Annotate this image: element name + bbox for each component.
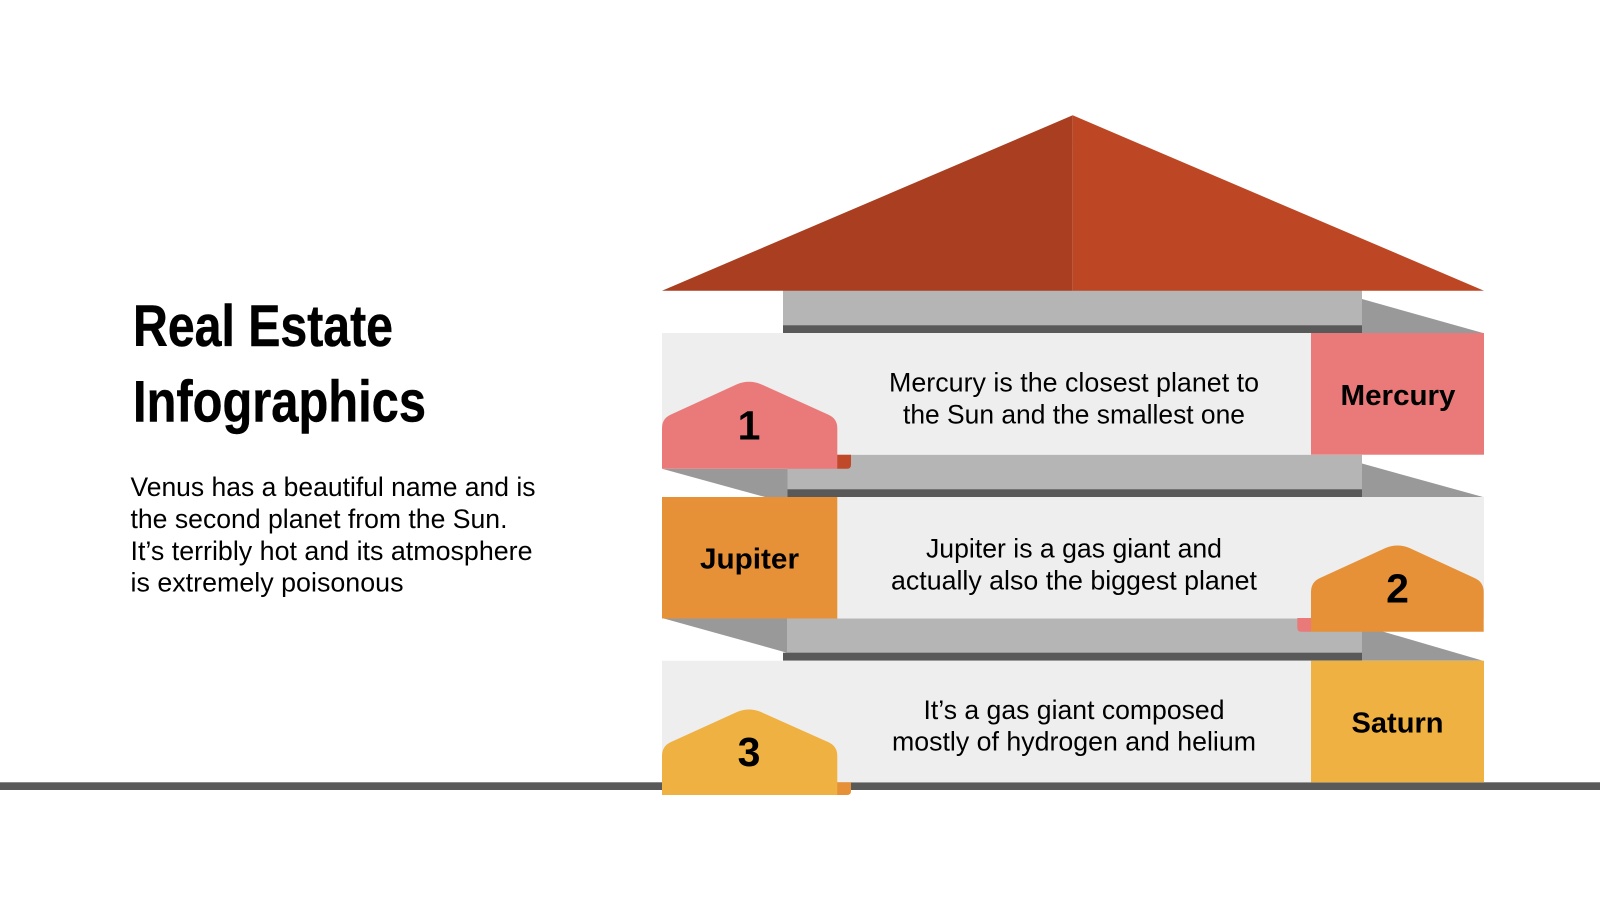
intro text block: is extremely poisonous bbox=[130, 568, 404, 598]
label: Jupiter: Jupiter bbox=[700, 544, 799, 576]
label: Mercury: Mercury bbox=[1340, 380, 1456, 412]
tab: number 3 fold bbox=[837, 782, 851, 795]
connector between floors 2 and 3 bbox=[662, 618, 1483, 661]
label: Mercury bbox=[1311, 333, 1484, 455]
roof bbox=[662, 115, 1484, 291]
badge: number 2: 2 bbox=[1386, 566, 1409, 612]
label: Saturn bbox=[1311, 661, 1484, 782]
panel: floor 1 Mercury bbox=[662, 333, 1484, 469]
intro text block bbox=[130, 472, 536, 598]
label: Jupiter bbox=[662, 497, 837, 618]
text: Saturn description: It’s a gas giant composed bbox=[924, 695, 1224, 725]
text: Mercury description: Mercury is the closest planet to bbox=[889, 368, 1259, 398]
text: Jupiter description: Jupiter is a gas giant and bbox=[926, 534, 1222, 564]
connector under roof bbox=[783, 290, 1483, 333]
text: Saturn description: mostly of hydrogen and helium bbox=[892, 727, 1256, 757]
title bbox=[133, 294, 426, 435]
ground line bbox=[0, 782, 1600, 790]
intro text block: the second planet from the Sun. bbox=[130, 504, 508, 534]
badge: number 1: 1 bbox=[738, 402, 760, 448]
title: Real Estate bbox=[133, 294, 393, 359]
badge: number 3 bbox=[662, 710, 837, 795]
intro text block: It’s terribly hot and its atmosphere bbox=[130, 536, 532, 566]
text: Saturn description bbox=[892, 695, 1256, 757]
panel: floor 3 Saturn bbox=[662, 661, 1484, 795]
label: Saturn: Saturn bbox=[1352, 708, 1444, 740]
tab: number 2 fold bbox=[1297, 618, 1311, 632]
title: Infographics bbox=[133, 370, 426, 435]
connector between floors 1 and 2 bbox=[662, 455, 1483, 497]
badge: number 2 bbox=[1311, 546, 1484, 632]
text: Jupiter description: actually also the biggest planet bbox=[891, 565, 1258, 595]
badge: number 3: 3 bbox=[738, 729, 760, 775]
text: Jupiter description bbox=[891, 534, 1258, 595]
intro text block: Venus has a beautiful name and is bbox=[130, 472, 536, 502]
house connectors bbox=[662, 290, 1483, 661]
panel: floor 2 Jupiter bbox=[662, 497, 1484, 632]
text: Mercury description bbox=[889, 368, 1259, 429]
badge: number 1 bbox=[662, 382, 837, 469]
tab: number 1 fold bbox=[837, 455, 851, 469]
text: Mercury description: the Sun and the smallest one bbox=[903, 399, 1245, 429]
